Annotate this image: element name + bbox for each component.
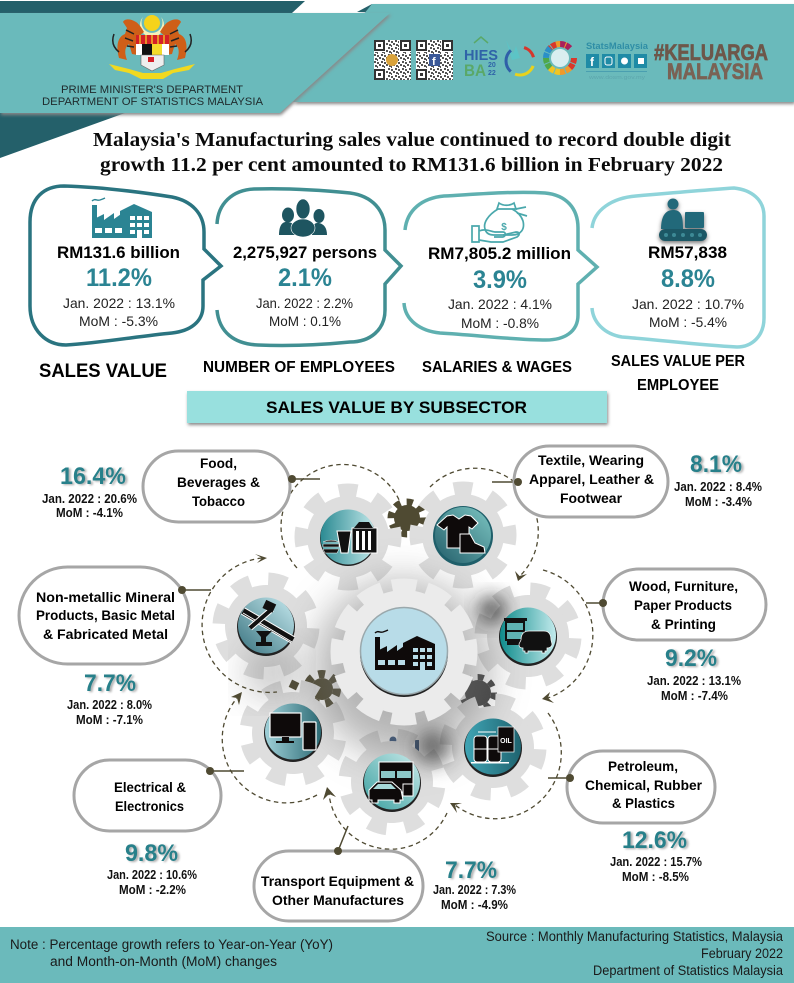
text: salary figures (428, 222, 571, 331)
small olive gear lower (289, 674, 337, 704)
panel: salaries and wages (404, 192, 597, 340)
gear shadows (250, 580, 506, 764)
icon: food (320, 510, 377, 566)
callout: food: Food, (200, 455, 237, 471)
callout: electrical: Electrical & (114, 779, 186, 795)
icon: monitor and phone (264, 704, 322, 762)
text: sales value figures (57, 244, 180, 329)
stat: non-metallic: Jan. 2022 : 8.0% (67, 698, 152, 712)
stat: petroleum (610, 827, 702, 884)
gear: wood (461, 569, 595, 703)
label: sales value per employee: EMPLOYEE (637, 377, 719, 394)
logo: Keluarga Malaysia (654, 40, 768, 84)
logo: HIES BA 2022 (464, 37, 498, 80)
icon: vehicles (363, 754, 421, 812)
stat: non-metallic: MoM : -7.1% (76, 713, 143, 727)
callout: food (143, 451, 296, 522)
stat: wood (647, 645, 741, 703)
text: sales value figures: 11.2% (86, 264, 152, 292)
logo: HIES BA 2022: HIES (464, 47, 498, 64)
callout: transport (254, 847, 423, 921)
stat: wood: 9.2% (665, 645, 717, 672)
callout: food: Tobacco (192, 493, 245, 509)
icon: QR code two (416, 40, 453, 80)
gear: petroleum (426, 680, 560, 814)
callout: transport: Other Manufactures (272, 892, 404, 908)
text: department names: PRIME MINISTER'S DEPARTMENT (61, 84, 244, 96)
text: department names: DEPARTMENT OF STATISTICS MALAYSIA (42, 96, 264, 108)
callout: non-metallic: Products, Basic Metal (36, 607, 175, 623)
logo: Keluarga Malaysia: MALAYSIA (667, 59, 763, 84)
stat: transport: MoM : -4.9% (441, 898, 508, 912)
logo: StatsMalaysia social: StatsMalaysia (586, 41, 649, 52)
source text: Department of Statistics Malaysia (593, 963, 783, 978)
text: employee figures: 2.1% (278, 264, 332, 292)
stat: wood: Jan. 2022 : 13.1% (647, 674, 741, 688)
icon: metal (237, 598, 295, 656)
source text (486, 929, 783, 978)
callout: transport: Transport Equipment & (261, 873, 414, 889)
callout: wood: Paper Products (634, 597, 732, 613)
text: employee figures: 2,275,927 persons (233, 244, 377, 262)
title: Malaysia's Manufacturing sales value continued to record double digit (93, 130, 732, 151)
gear: electrical (222, 662, 364, 804)
callout: textile: Footwear (560, 490, 623, 506)
stat: food: MoM : -4.1% (56, 506, 123, 520)
logo: StatsMalaysia social: f (590, 55, 595, 69)
icon: furniture (499, 608, 557, 666)
icon: QR code two: f (432, 56, 436, 68)
stat: transport: 7.7% (445, 857, 497, 884)
icon: worker and conveyor (659, 198, 707, 241)
title (93, 130, 732, 176)
stat: wood: MoM : -7.4% (661, 689, 728, 703)
label: sales value per employee (611, 353, 745, 394)
icon: QR code one (374, 40, 411, 80)
callout: petroleum: Petroleum, (608, 758, 678, 774)
text: per employee figures: MoM : -5.4% (649, 314, 727, 330)
callout: electrical: Electronics (115, 798, 184, 814)
callout: non-metallic: Non-metallic Mineral (36, 589, 175, 605)
gear: transport (322, 712, 462, 852)
stat: electrical: 9.8% (125, 840, 178, 867)
text: sales value figures: Jan. 2022 : 13.1% (63, 295, 175, 311)
note text (10, 937, 333, 969)
stat: non-metallic (67, 670, 152, 727)
label: salaries and wages: SALARIES & WAGES (422, 359, 572, 376)
gears diagram (19, 446, 766, 921)
callout: textile: Apparel, Leather & (529, 471, 654, 487)
logo: HIES BA 2022: 20 (488, 62, 496, 69)
panel: number of employees (217, 189, 401, 345)
dashed arc arrows (202, 464, 593, 849)
text: sales value figures: RM131.6 billion (57, 244, 180, 262)
callout: food: Beverages & (177, 474, 260, 490)
callout: wood: Wood, Furniture, (629, 578, 738, 594)
icon: factory black (375, 630, 435, 670)
gear: centre (328, 576, 480, 728)
text: sales value figures: MoM : -5.3% (79, 313, 158, 329)
text: salary figures: $ (501, 222, 507, 233)
label: number of employees: NUMBER OF EMPLOYEES (203, 359, 395, 376)
header banner (0, 1, 794, 158)
stat: electrical: Jan. 2022 : 10.6% (107, 868, 197, 882)
text: salary figures: RM7,805.2 million (428, 245, 571, 263)
icon: oil tanks: OIL (500, 738, 513, 745)
text: salary figures: MoM : -0.8% (461, 315, 539, 331)
note text: Note : Percentage growth refers to Year-on-Year (YoY) (10, 937, 333, 952)
text: employee figures: Jan. 2022 : 2.2% (256, 295, 353, 311)
callout: wood (599, 569, 766, 640)
stat: electrical: MoM : -2.2% (119, 883, 186, 897)
panel: sales value (30, 186, 221, 345)
panel: centre factory circle (360, 608, 448, 697)
text: employee figures (233, 244, 377, 329)
icon: coat of arms (109, 15, 195, 79)
gear: textile (408, 480, 518, 590)
footer (0, 927, 794, 983)
text: per employee figures: RM57,838 (648, 244, 727, 262)
small olive gear top (391, 502, 423, 534)
icon: factory (92, 198, 152, 238)
stat: non-metallic: 7.7% (84, 670, 136, 697)
label: sales value per employee: SALES VALUE PER (611, 353, 745, 370)
stat: transport: Jan. 2022 : 7.3% (433, 883, 516, 897)
source text: Source : Monthly Manufacturing Statistics, Malaysia (486, 929, 783, 944)
callout: textile: Textile, Wearing (538, 452, 644, 468)
source text: February 2022 (701, 946, 783, 961)
stat: food: 16.4% (60, 463, 126, 490)
stat: petroleum: 12.6% (622, 827, 687, 854)
stat: textile: MoM : -3.4% (685, 495, 752, 509)
label: sales value: SALES VALUE (39, 361, 167, 382)
stat: petroleum: Jan. 2022 : 15.7% (610, 855, 702, 869)
callout: non-metallic: & Fabricated Metal (43, 626, 168, 642)
callout: non-metallic (19, 567, 189, 664)
text: per employee figures: 8.8% (661, 265, 715, 293)
banner: sales value by subsector: SALES VALUE BY SUBSECTOR (266, 398, 527, 417)
stat: transport (433, 857, 516, 912)
stat: textile (674, 451, 762, 509)
stat: electrical (107, 840, 197, 897)
icon: textile (433, 506, 493, 566)
callout: petroleum: & Plastics (612, 795, 675, 811)
text: salary figures: Jan. 2022 : 4.1% (448, 296, 552, 312)
title: growth 11.2 per cent amounted to RM131.6 billion in February 2022 (100, 155, 723, 176)
text: employee figures: MoM : 0.1% (269, 313, 341, 329)
logo: StatsMalaysia social (586, 41, 649, 81)
callout: petroleum (566, 751, 715, 823)
logo: Keluarga Malaysia: #KELUARGA (654, 40, 768, 65)
callout: textile (514, 446, 668, 517)
callout: petroleum: Chemical, Rubber (585, 777, 703, 793)
icon: oil tanks (464, 718, 522, 777)
logo: colour ring (506, 40, 534, 75)
panel: sales value per employee (592, 188, 764, 347)
icon: money bag and hand (472, 203, 527, 242)
stat: food (42, 463, 137, 520)
text: per employee figures (632, 244, 744, 330)
logo: HIES BA 2022: 22 (488, 70, 496, 77)
icon: people (279, 199, 327, 237)
stat: textile: Jan. 2022 : 8.4% (674, 480, 762, 494)
stat: textile: 8.1% (690, 451, 742, 478)
logo: SDG wheel (546, 44, 574, 72)
small blue gear bits (390, 736, 419, 752)
logo: HIES BA 2022: BA (464, 61, 486, 80)
stat: food: Jan. 2022 : 20.6% (42, 492, 137, 506)
text: department names (42, 84, 264, 108)
text: salary figures: 3.9% (473, 266, 527, 294)
text: per employee figures: Jan. 2022 : 10.7% (632, 296, 744, 312)
note text: and Month-on-Month (MoM) changes (50, 954, 277, 969)
gear: non-metallic (199, 559, 333, 693)
gear: food (293, 482, 403, 592)
connector lines (183, 479, 603, 851)
small grey gear (462, 677, 494, 709)
callout: wood: & Printing (651, 616, 716, 632)
logo: StatsMalaysia social: www.dosm.gov.my (588, 75, 645, 81)
callout: electrical (74, 760, 221, 831)
banner: sales value by subsector (187, 391, 607, 423)
stat: petroleum: MoM : -8.5% (622, 870, 689, 884)
